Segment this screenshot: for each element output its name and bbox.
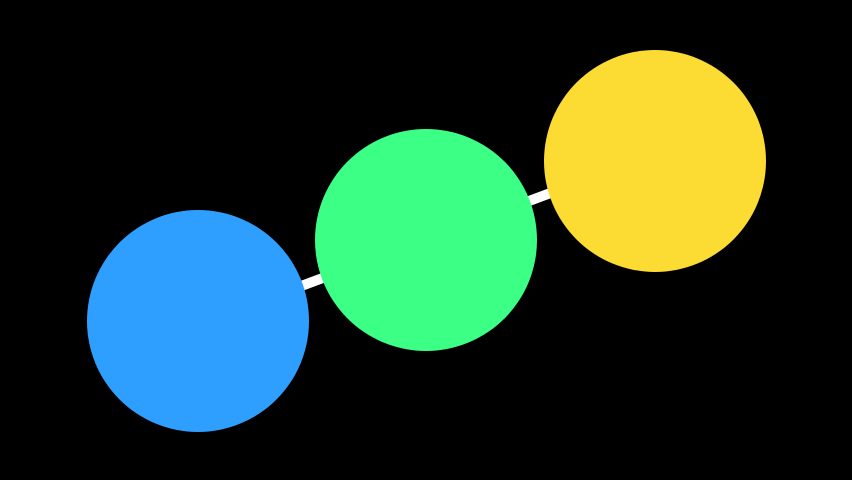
circle: blue <box>87 210 309 432</box>
circle: green <box>315 129 537 351</box>
connector line: blue to green <box>198 240 426 324</box>
connector line: green to yellow <box>426 154 655 240</box>
circle: yellow <box>544 50 766 272</box>
